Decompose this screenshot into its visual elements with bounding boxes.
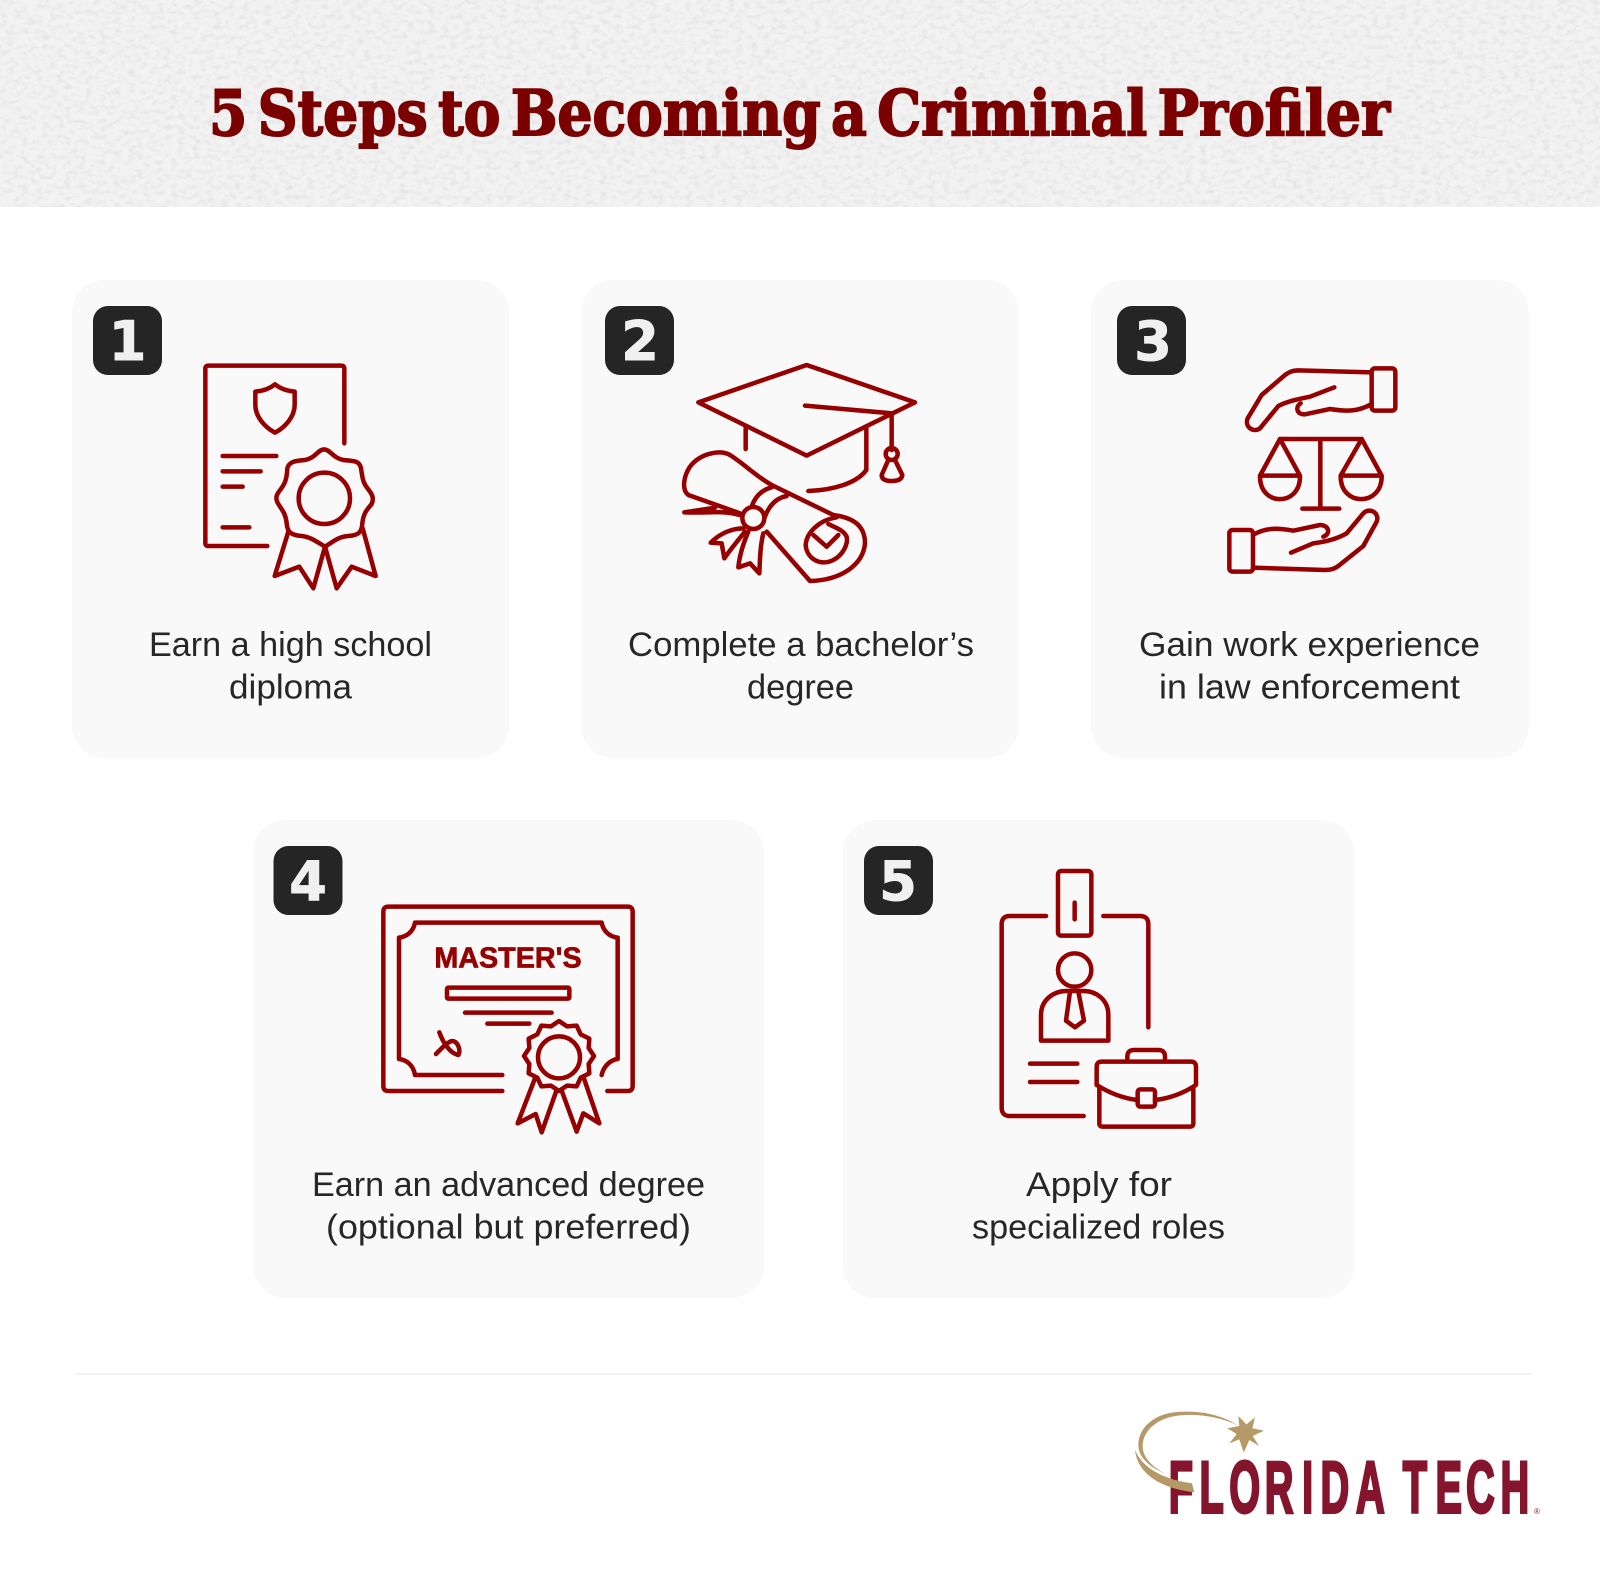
icon: hands and scales — [1229, 368, 1395, 572]
caption: step 5 — [972, 1166, 1225, 1247]
icon: id badge and briefcase — [1002, 871, 1196, 1127]
panel: step 2 — [581, 280, 1019, 758]
badge: 4 — [274, 846, 342, 915]
caption: step 3: Gain work experience — [1139, 626, 1480, 664]
caption: step 1: diploma — [229, 669, 352, 707]
logo: Florida Tech — [1135, 1412, 1540, 1529]
badge: 2: 2 — [621, 310, 659, 373]
panel: step 5 — [843, 820, 1354, 1298]
panel: step 3 — [1091, 280, 1529, 758]
caption: step 3: in law enforcement — [1159, 669, 1461, 707]
badge: 3 — [1117, 306, 1186, 375]
caption: step 4: (optional but preferred) — [326, 1209, 691, 1247]
icon: master's certificate — [383, 907, 633, 1132]
icon: diploma with seal — [205, 366, 376, 588]
panel: step 1 — [72, 280, 509, 758]
caption: step 1 — [149, 626, 432, 707]
badge: 1 — [93, 306, 162, 375]
logo: Florida Tech: ® — [1534, 1507, 1540, 1516]
certificate label: MASTER'S — [434, 943, 582, 975]
icon: graduation cap and scroll — [684, 365, 915, 581]
caption: step 2: degree — [747, 669, 854, 707]
caption: step 5: specialized roles — [972, 1209, 1225, 1247]
header band — [0, 0, 1600, 207]
caption: step 4: Earn an advanced degree — [312, 1166, 705, 1204]
caption: step 5: Apply for — [1026, 1166, 1172, 1204]
badge: 1: 1 — [109, 310, 146, 373]
caption: step 1: Earn a high school — [149, 626, 432, 664]
caption: step 2 — [628, 626, 974, 707]
caption: step 2: Complete a bachelor’s — [628, 626, 974, 664]
badge: 5 — [864, 846, 933, 915]
badge: 5: 5 — [879, 850, 917, 913]
caption: step 4 — [312, 1166, 705, 1247]
panel: step 4 — [253, 820, 764, 1298]
badge: 4: 4 — [289, 850, 327, 913]
badge: 2 — [605, 306, 674, 375]
badge: 3: 3 — [1134, 310, 1172, 373]
logo: Florida Tech: FLORIDA TECH — [1169, 1448, 1529, 1529]
caption: step 3 — [1139, 626, 1480, 707]
title: 5 Steps to Becoming a Criminal Profiler — [209, 76, 1391, 150]
